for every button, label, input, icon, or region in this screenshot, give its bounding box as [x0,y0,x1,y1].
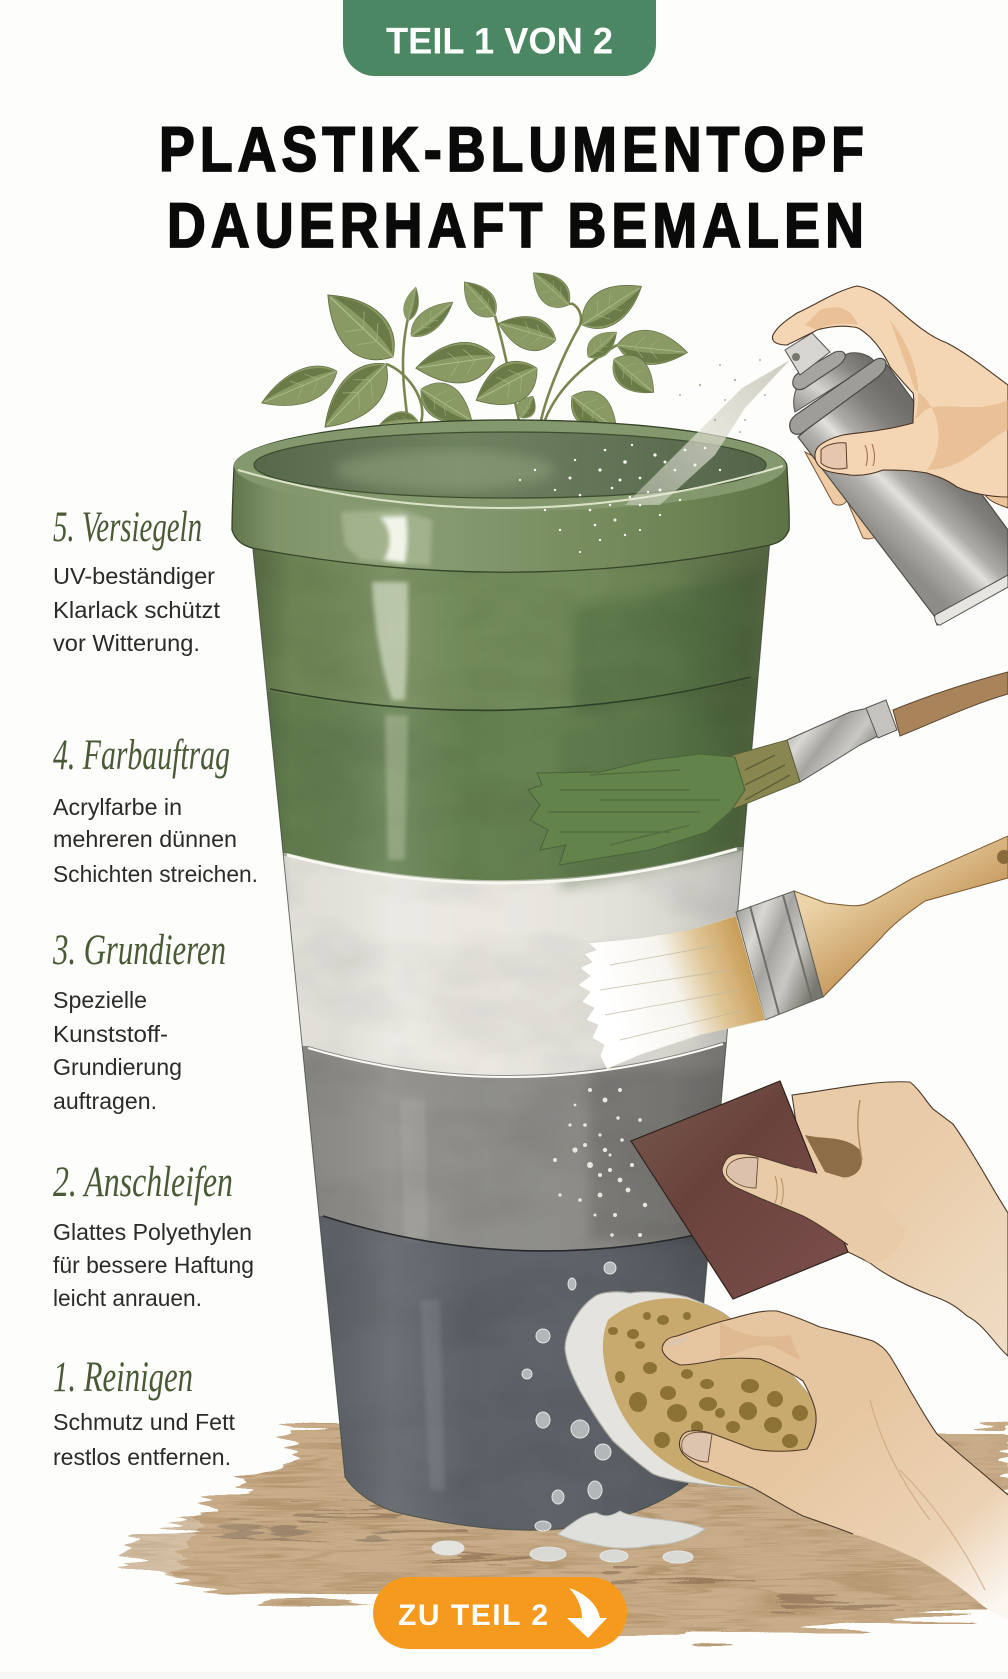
step 2: leicht anrauen. [53,1285,202,1311]
title [159,115,869,261]
step 1 [53,1354,236,1470]
bottom page strip [0,1672,1008,1679]
wide brush with white primer [578,836,1008,1069]
step 4: Schichten streichen. [53,861,258,887]
step 1: restlos entfernen. [53,1444,231,1470]
water droplets [432,1262,693,1563]
sandpaper sheet [631,1081,848,1299]
step 4 [53,732,258,887]
step 2: Glattes Polyethylen [53,1219,252,1245]
title: DAUERHAFT BEMALEN [167,191,869,261]
plant with leaves [255,263,689,443]
spray mist [519,359,790,553]
step 1: Schmutz und Fett [53,1409,236,1435]
pot rim [232,420,789,572]
step 4: mehreren dünnen [53,826,237,852]
button: zu Teil 2 [373,1577,627,1649]
step 5: 5. Versiegeln [53,504,202,551]
button: zu Teil 2: ZU TEIL 2 [398,1599,548,1632]
sandpaper hand thumb [722,1154,905,1263]
spray can [785,333,1008,625]
step 5: UV-beständiger [53,563,215,589]
hand holding spray can [772,286,1008,508]
step 3: Grundierung [53,1054,182,1080]
step 3: 3. Grundieren [52,927,226,974]
hand holding sponge [662,1311,1008,1620]
step 2: 2. Anschleifen [53,1159,233,1206]
nozzle [785,333,830,375]
grey sanded layer [302,1042,726,1250]
step 4: Acrylfarbe in [53,794,182,820]
green paint layer [253,546,770,880]
step 3: auftragen. [53,1088,157,1114]
step 5 [53,504,221,656]
title: PLASTIK-BLUMENTOPF [159,115,869,185]
step 2 [53,1159,254,1311]
hand holding sandpaper, fingers [792,1082,1008,1356]
step 3: Spezielle [53,987,147,1013]
thin brush with green paint [528,672,1008,865]
step 1: 1. Reinigen [53,1354,193,1401]
icon: curved down arrow [567,1588,607,1638]
step 3 [52,927,226,1114]
green paint stroke [528,754,745,865]
step 3: Kunststoff- [53,1021,168,1047]
step 5: Klarlack schützt [53,597,221,623]
sponge [565,1292,817,1488]
step 5: vor Witterung. [53,630,200,656]
step 4: 4. Farbauftrag [53,732,230,779]
flower pot with paint layers [252,546,770,1531]
step 2: für bessere Haftung [53,1252,254,1278]
foam puddle [558,1511,705,1548]
wooden table surface [100,1420,1008,1645]
white primer layer [283,847,744,1075]
top badge: Teil 1 von 2 [343,0,656,76]
sanding dust [553,1088,647,1237]
fingers behind can [805,452,875,539]
top badge: Teil 1 von 2: TEIL 1 VON 2 [386,20,613,62]
